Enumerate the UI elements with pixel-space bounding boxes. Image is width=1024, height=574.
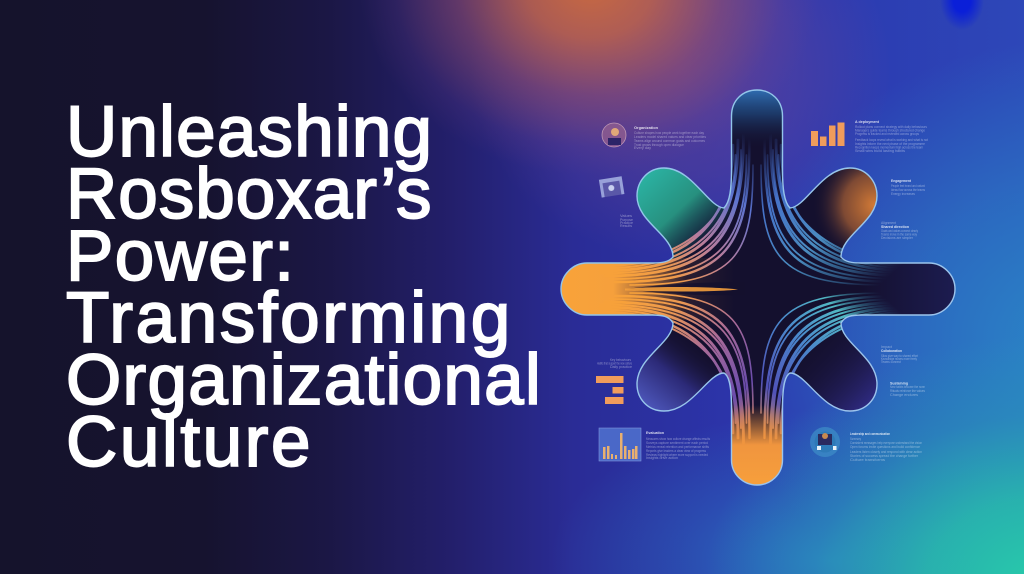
text block: collaboration xyxy=(881,345,918,364)
text block: leadership: Leadership and communication xyxy=(850,431,890,436)
chart: boxed column chart xyxy=(599,428,641,461)
title xyxy=(66,93,542,482)
text block: small list: Practice xyxy=(620,221,633,225)
text block: collaboration: Collaboration xyxy=(881,348,902,353)
text block: deployment: Small wins build lasting habits xyxy=(855,149,905,153)
text block: evaluation: Evaluation xyxy=(646,430,664,435)
text block: collaboration: Knowledge moves more freely xyxy=(881,357,917,361)
text block: deployment: Rollout plans connect strategy with daily behaviours xyxy=(855,125,927,129)
bar chart: top orange bars xyxy=(811,122,844,146)
text block: evaluation: Reviews highlight where more support is needed xyxy=(646,453,708,457)
text block: engagement: Engagement xyxy=(891,178,912,183)
panel: top-left portrait note: Leaders model shared values and clear priorities xyxy=(634,135,706,139)
text block: right-aligned note: Key behaviours xyxy=(610,358,631,362)
text block: collaboration: Silos give way to shared effort xyxy=(881,354,918,358)
text block: small list: Values xyxy=(620,214,633,218)
text block: alignment: Teams move in the same way xyxy=(881,232,917,236)
title: Unleashing xyxy=(66,93,433,172)
title: Organizational xyxy=(66,341,542,420)
text block: alignment xyxy=(881,221,918,240)
icon: photo frame xyxy=(599,176,624,198)
text block: leadership xyxy=(850,431,922,462)
text block: evaluation: Reports give leaders a clear view of progress xyxy=(646,449,706,453)
text block: collaboration: Impact xyxy=(881,345,892,349)
bar chart: horizontal orange bars xyxy=(596,376,624,404)
text block: leadership: Open forums invite questions and build confidence xyxy=(850,445,920,449)
text block: small list: Purpose xyxy=(620,218,633,222)
text block: deployment xyxy=(855,119,928,153)
text block: sustainability: Change endures xyxy=(890,393,918,397)
text block: sustainability xyxy=(890,380,925,397)
text block: engagement xyxy=(891,178,925,196)
icon: team portrait xyxy=(810,427,840,457)
text block: deployment: Managers guide teams through structured change xyxy=(855,128,925,132)
title: Rosboxar’s xyxy=(66,155,432,234)
panel: top-left portrait note: Every day xyxy=(634,146,651,150)
text block: engagement: Energy increases xyxy=(891,192,915,196)
text block: alignment: Goals and values connect clearly xyxy=(881,229,918,233)
panel: top-left portrait note: Teams align around common goals and outcomes xyxy=(634,139,705,143)
text block: sustainability: New habits become the norm xyxy=(890,385,925,389)
text block: leadership: Culture transforms xyxy=(850,458,886,462)
panel: top-left portrait note: Culture shapes how people work together each day xyxy=(634,131,704,135)
title: Transforming xyxy=(66,279,513,358)
text block: leadership: Summary xyxy=(850,437,861,441)
text block: evaluation: Surveys capture sentiment over each period xyxy=(646,441,708,445)
text block: deployment: Feedback loops reveal what is working and what is not xyxy=(855,138,928,142)
text block: right-aligned note: Daily practice xyxy=(610,365,632,369)
text block: evaluation: Metrics reveal retention and performance shifts xyxy=(646,445,709,449)
panel: top-left portrait note xyxy=(602,123,706,150)
text block: collaboration: Teams connect xyxy=(881,360,901,364)
text block: evaluation: Insights drive action xyxy=(646,456,678,460)
text block: alignment: Shared direction xyxy=(881,224,909,229)
text block: evaluation: Measures show how culture change affects results xyxy=(646,437,710,441)
text block: deployment: Recognition keeps momentum high across the team xyxy=(855,146,923,150)
title: Culture xyxy=(66,403,313,482)
text block: right-aligned note xyxy=(597,358,632,369)
text block: deployment: Progress is tracked and reviewed across groups xyxy=(855,132,919,136)
text block: deployment: Insights inform the next phase of the programme xyxy=(855,142,925,146)
panel: top-left portrait note: Trust grows through open dialogue xyxy=(634,143,684,147)
text block: alignment: Alignment xyxy=(881,221,896,225)
text block: leadership: Stories of success spread the change further xyxy=(850,454,919,458)
text block: sustainability: Rituals reinforce the values xyxy=(890,389,925,393)
text block: evaluation xyxy=(646,430,710,460)
text block: leadership: Leaders listen closely and respond with clear action xyxy=(850,450,922,454)
text block: alignment: Decisions are simpler xyxy=(881,236,914,240)
text block: leadership: Consistent messages help everyone understand the vision xyxy=(850,441,922,445)
text block: small list: Results xyxy=(620,224,632,228)
panel: top-left portrait note: Organization xyxy=(634,125,659,130)
text block: engagement: People feel heard and valued xyxy=(891,184,925,188)
text block: sustainability: Sustaining xyxy=(890,380,908,386)
title: Power: xyxy=(66,217,295,296)
central star shape with flowing streaks xyxy=(555,90,960,488)
text block: small list xyxy=(620,214,633,228)
text block: engagement: Ideas flow across the teams xyxy=(891,188,925,192)
text block: deployment: A deployment xyxy=(855,119,880,124)
text block: right-aligned note: Habits that support the new culture xyxy=(597,362,632,366)
